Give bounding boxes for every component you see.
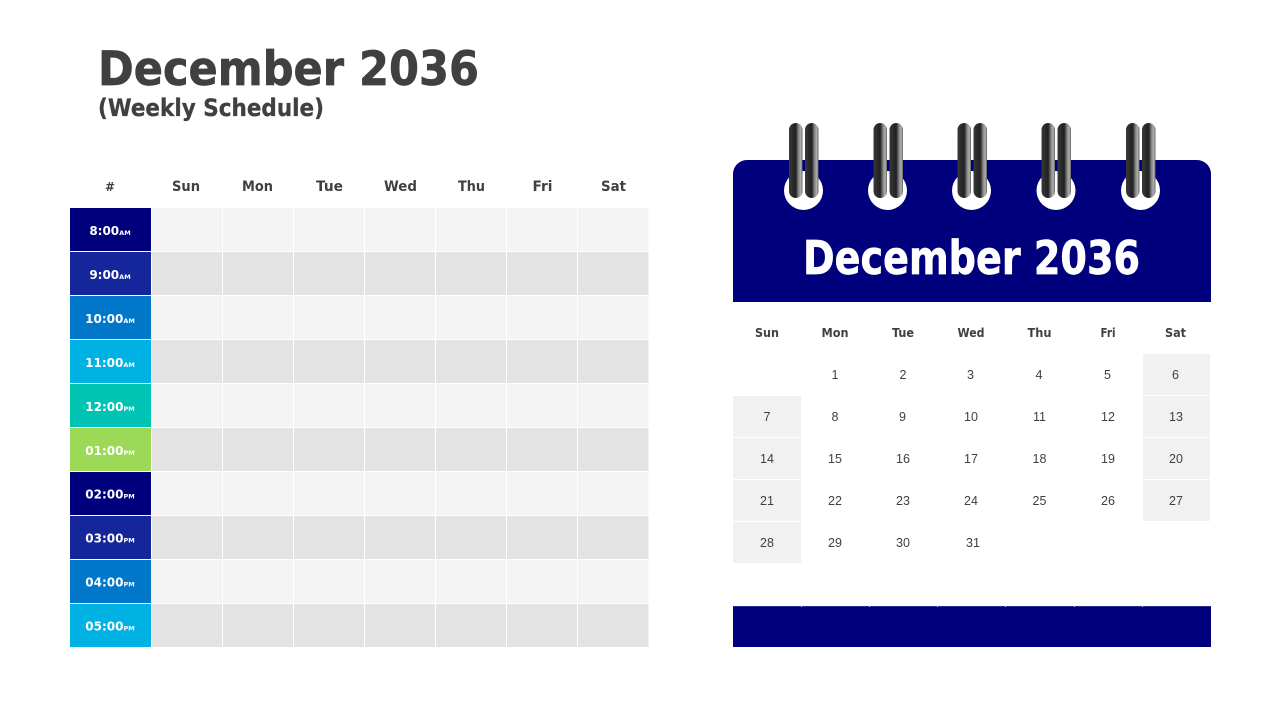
table header row: # [105, 180, 115, 194]
calendar dates: 27 [1169, 494, 1183, 508]
table header row: Fri [532, 179, 552, 195]
calendar dates: 3 [967, 368, 974, 382]
calendar dates: 11 [1033, 410, 1046, 424]
weekday header: Fri [1100, 325, 1116, 340]
calendar dates: 23 [896, 494, 910, 508]
table header row [105, 179, 626, 195]
time labels: 05:00PM [85, 620, 135, 634]
calendar dates: 2 [900, 368, 907, 382]
time labels: 01:00PM [85, 444, 135, 458]
time labels: 03:00PM [85, 532, 135, 546]
weekday header: Thu [1028, 325, 1052, 340]
time labels: 9:00AM [89, 268, 131, 282]
weekday header: Tue [892, 325, 914, 340]
table header row: Thu [458, 179, 485, 195]
calendar dates: 31 [966, 536, 980, 550]
calendar footer bar [733, 606, 1211, 647]
calendar dates: 25 [1033, 494, 1046, 508]
calendar header panel: December 2036 [803, 231, 1140, 285]
calendar dates: 1 [832, 368, 839, 382]
table header row: Tue [316, 179, 343, 195]
calendar dates: 20 [1169, 452, 1183, 466]
table header row: Sun [172, 179, 200, 195]
weekly schedule table [70, 179, 648, 647]
calendar dates: 22 [828, 494, 842, 508]
weekday header [755, 325, 1186, 340]
title: December 2036 [98, 42, 479, 97]
time labels: 04:00PM [85, 576, 135, 590]
calendar dates: 28 [760, 536, 774, 550]
calendar header panel [733, 160, 1211, 302]
calendar dates: 26 [1101, 494, 1115, 508]
calendar dates: 29 [828, 536, 842, 550]
title [98, 42, 479, 122]
schedule grid cells [152, 208, 648, 647]
calendar dates: 9 [899, 410, 906, 424]
time labels: 02:00PM [85, 488, 135, 502]
calendar dates: 19 [1101, 452, 1115, 466]
calendar dates: 13 [1169, 410, 1183, 424]
calendar dates: 18 [1033, 452, 1046, 466]
weekday header: Sat [1165, 325, 1186, 340]
table header row: Wed [384, 179, 417, 195]
calendar dates: 14 [760, 452, 774, 466]
calendar dates: 4 [1036, 368, 1043, 382]
calendar dates: 12 [1101, 410, 1115, 424]
calendar dates: 10 [964, 410, 978, 424]
weekday header: Sun [755, 325, 779, 340]
monthly calendar [733, 123, 1211, 647]
calendar dates: 15 [828, 452, 842, 466]
weekday header: Wed [958, 325, 984, 340]
calendar dates [760, 368, 1183, 550]
calendar dates: 5 [1104, 368, 1111, 382]
calendar dates: 30 [896, 536, 910, 550]
calendar dates: 16 [896, 452, 910, 466]
calendar dates: 24 [964, 494, 978, 508]
time labels: 12:00PM [85, 400, 135, 414]
binding holes [784, 171, 1160, 210]
title: (Weekly Schedule) [98, 94, 324, 122]
table header row: Sat [601, 179, 626, 195]
time labels: 11:00AM [85, 356, 135, 370]
spiral rings [789, 123, 1156, 198]
weekday header: Mon [822, 325, 848, 340]
calendar dates: 17 [964, 452, 978, 466]
time labels: 10:00AM [85, 312, 135, 326]
weekend shading [733, 354, 1210, 563]
time labels [70, 208, 151, 647]
calendar dates: 8 [832, 410, 839, 424]
calendar dates: 7 [764, 410, 771, 424]
time labels: 8:00AM [89, 224, 131, 238]
calendar dates: 6 [1172, 368, 1179, 382]
calendar dates: 21 [760, 494, 774, 508]
table header row: Mon [242, 179, 273, 195]
